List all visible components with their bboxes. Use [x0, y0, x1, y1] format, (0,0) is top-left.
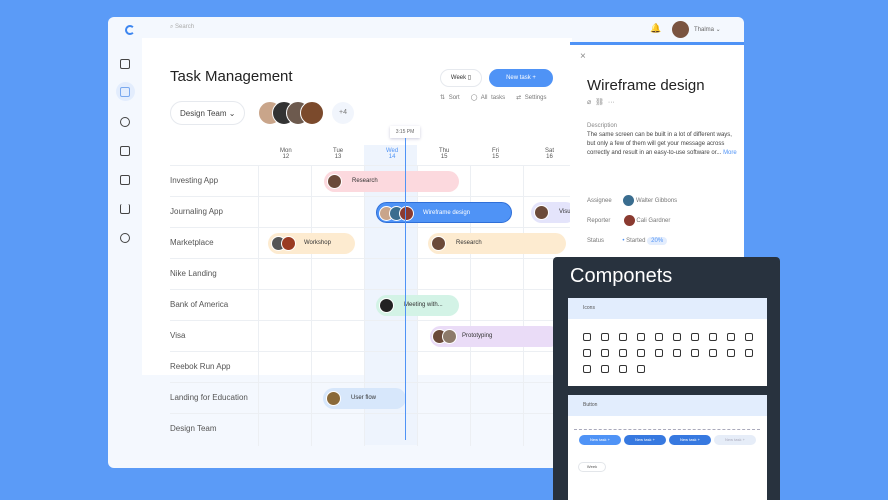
team dropdown: Design Team ⌄ — [180, 109, 235, 118]
time tooltip — [390, 126, 420, 138]
day headers: Tue — [333, 148, 343, 154]
day headers: Fri — [492, 148, 499, 154]
main window — [108, 17, 744, 468]
components heading: Componets — [570, 265, 672, 287]
day headers: 15 — [441, 154, 448, 160]
user: Thalma ⌄ — [694, 27, 721, 33]
text: Journaling App — [170, 207, 223, 216]
text: Bank of America — [170, 300, 228, 309]
row labels: Investing App — [170, 176, 218, 185]
attributes: Status • Started 20% — [587, 238, 663, 244]
bar: visual — [531, 202, 576, 223]
bar: workshop: Workshop — [304, 240, 331, 246]
row labels — [170, 166, 570, 197]
buttons card: New task + — [725, 437, 745, 442]
text: Marketplace — [170, 238, 214, 247]
bar: workshop — [268, 233, 355, 254]
bar: user flow — [323, 388, 406, 409]
day headers: 12 — [282, 154, 289, 160]
day headers: Sat — [545, 148, 554, 154]
bar: prototyping — [430, 326, 560, 347]
buttons card: New task + — [680, 437, 700, 442]
bar: research: Research — [352, 178, 378, 184]
user: 🔔 — [650, 23, 661, 33]
detail title: Wireframe design — [587, 77, 705, 94]
top bar — [125, 21, 721, 38]
day headers: 15 — [492, 154, 499, 160]
bar: meeting: Meeting with... — [404, 302, 443, 308]
current time line — [405, 138, 406, 440]
user — [650, 21, 721, 38]
buttons card: New task + — [590, 437, 610, 442]
attributes — [587, 195, 677, 264]
bar: research 2 — [428, 233, 566, 254]
day headers — [280, 148, 554, 160]
buttons card: Week — [587, 464, 597, 469]
text: Nike Landing — [170, 269, 217, 278]
text: Reebok Run App — [170, 362, 230, 371]
attributes: Reporter Cali Gardner — [587, 218, 670, 224]
attributes: Priority ▬ Medium — [587, 258, 651, 264]
buttons card: New task + — [635, 437, 655, 442]
day headers: Wed — [386, 148, 398, 154]
new task button: New task + — [506, 75, 536, 81]
day headers: Thu — [439, 148, 449, 154]
description: The same screen can be built in a lot of different ways, but only a few of them will get your message across correctly and result in an easy-to-use software or... More — [587, 132, 737, 156]
text: Design Team — [170, 424, 217, 433]
components panel — [553, 257, 780, 500]
attributes: Assignee Walter Gibbons — [587, 198, 677, 204]
day headers: 13 — [335, 154, 341, 160]
team avatars — [259, 102, 354, 124]
toolbar: ⇅ Sort ◯ All tasks ⇄ Settings — [440, 95, 546, 101]
logo — [125, 25, 135, 35]
buttons card: Button — [583, 402, 597, 408]
search: ⌕ Search — [170, 24, 194, 30]
bar: wireframe design — [376, 202, 512, 223]
detail panel — [570, 42, 744, 262]
icons card: Icons — [583, 305, 595, 311]
close: × — [580, 51, 586, 62]
bar: meeting — [376, 295, 459, 316]
highlighted column — [364, 145, 417, 445]
content white panel — [142, 38, 572, 375]
bar: prototyping: Prototyping — [462, 333, 492, 339]
grid — [170, 165, 570, 445]
description: Description — [587, 123, 617, 129]
time tooltip: 3:15 PM — [396, 129, 414, 135]
team avatars: +4 — [339, 109, 347, 116]
day headers: 14 — [389, 154, 395, 160]
bar: user flow: User flow — [351, 395, 376, 401]
bar: wireframe design: Wireframe design — [423, 210, 470, 216]
sidebar icons — [116, 59, 135, 243]
detail panel: ⌀ ⛓ ··· — [587, 99, 615, 106]
week button — [440, 69, 482, 87]
day headers: 16 — [546, 154, 553, 160]
title: Task Management — [170, 68, 293, 85]
week button: Week ▯ — [451, 75, 471, 81]
bar: research — [324, 171, 459, 192]
day headers: Mon — [280, 148, 292, 154]
bar: research 2: Research — [456, 240, 482, 246]
buttons card — [568, 395, 767, 500]
text: Visa — [170, 331, 185, 340]
new task button — [489, 69, 553, 87]
bar: visual: Visual — [559, 209, 575, 215]
team dropdown — [170, 101, 245, 125]
icons card — [568, 298, 767, 386]
text: Landing for Education — [170, 393, 248, 402]
